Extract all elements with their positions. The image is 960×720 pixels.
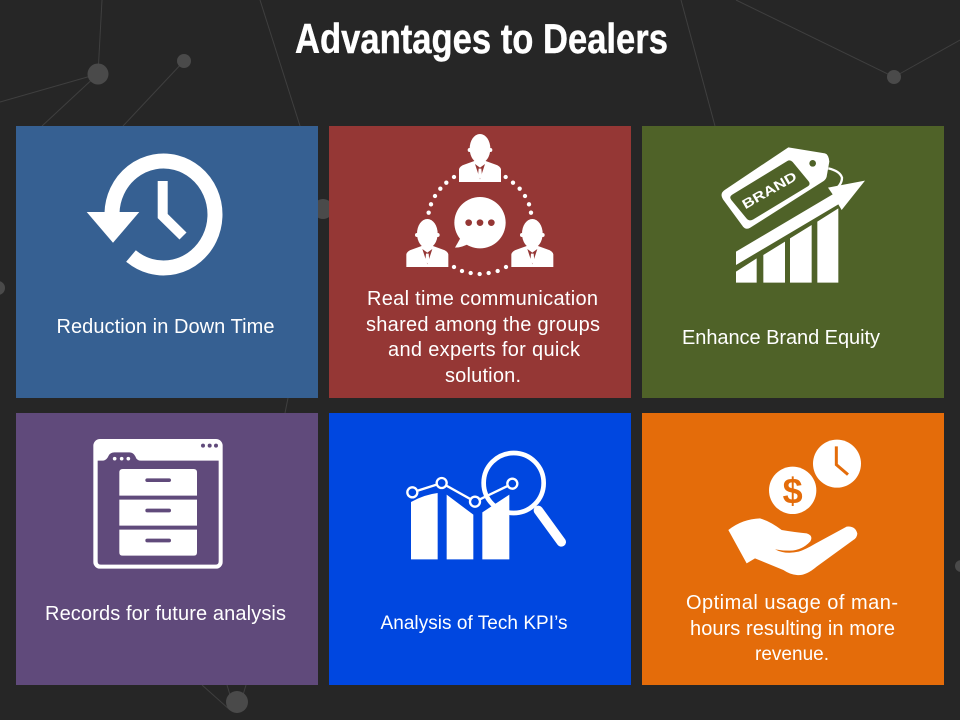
text: optimal usage of man-hours: hours resulting in more bbox=[690, 618, 895, 640]
label: analysis of tech kpis: Analysis of Tech KPI’s bbox=[380, 613, 568, 634]
icon: trend line bbox=[407, 478, 517, 507]
text: optimal usage of man-hours: revenue. bbox=[755, 644, 829, 665]
panel: enhance brand equity bbox=[642, 126, 944, 398]
icon: rising arrow bbox=[736, 181, 865, 265]
text: real time communication: and experts for quick bbox=[388, 339, 581, 361]
icon: clock with return arrow bbox=[87, 161, 215, 268]
icon: magnifier bbox=[484, 453, 561, 542]
icon: chart with magnifier bbox=[407, 453, 561, 559]
label: records for future analysis: Records for future analysis bbox=[45, 603, 286, 625]
icon: bars bbox=[736, 208, 838, 283]
text: real time communication: shared among the groups bbox=[366, 314, 600, 336]
icon: clock bbox=[813, 440, 861, 488]
panel: analysis of tech kpis bbox=[329, 413, 631, 685]
icon: filing cabinet window bbox=[93, 439, 223, 569]
title: Advantages to Dealers bbox=[295, 15, 668, 62]
text: real time communication: solution. bbox=[445, 365, 521, 387]
icon: brand tag: BRAND bbox=[739, 168, 800, 212]
panel: reduction in down time bbox=[16, 126, 318, 398]
text: optimal usage of man-hours: Optimal usage of man- bbox=[686, 592, 898, 614]
icon: right person bbox=[511, 219, 553, 267]
text: optimal usage of man-hours bbox=[686, 592, 898, 665]
icon: brand tag with rising chart bbox=[722, 147, 865, 283]
icon: team communication bbox=[406, 134, 553, 276]
text: real time communication: Real time communication bbox=[367, 288, 598, 310]
text: real time communication bbox=[366, 288, 600, 387]
icon: open hand bbox=[728, 518, 857, 575]
label: enhance brand equity: Enhance Brand Equity bbox=[682, 327, 880, 349]
icon: brand tag bbox=[722, 147, 842, 229]
icon: hand with coin and clock bbox=[728, 440, 861, 575]
icon: left person bbox=[406, 219, 448, 267]
icon: dollar coin: $ bbox=[783, 470, 803, 511]
panel: real time communication bbox=[329, 126, 631, 398]
panel: records for future analysis bbox=[16, 413, 318, 685]
panel: optimal usage of man-hours bbox=[642, 413, 944, 685]
icon: chart bars bbox=[411, 493, 509, 559]
label: reduction in down time: Reduction in Down Time bbox=[56, 316, 274, 338]
icon: speech bubble bbox=[454, 197, 506, 248]
icon: top person bbox=[459, 134, 501, 182]
icon: dotted ring bbox=[426, 175, 533, 276]
